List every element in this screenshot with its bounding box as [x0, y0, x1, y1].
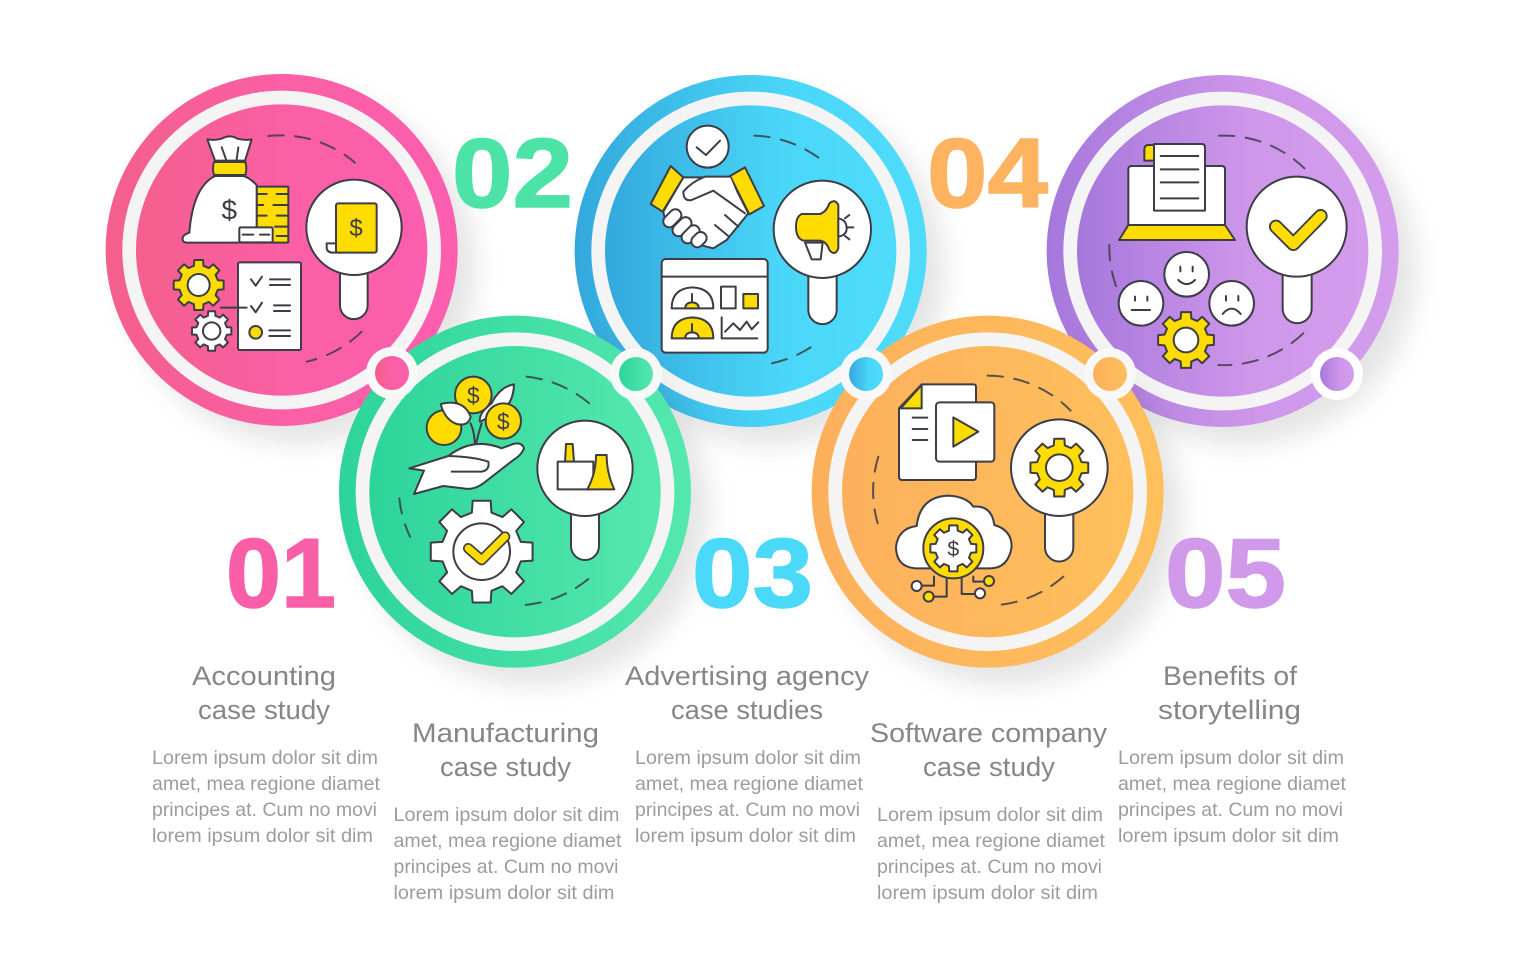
icon: money bag with coins: $	[222, 194, 238, 225]
text block: manufacturing: principes at. Cum no movi	[394, 856, 618, 878]
text block: accounting: amet, mea regione diamet	[152, 773, 381, 795]
panel: software company circle	[812, 316, 1182, 686]
text block: manufacturing: Lorem ipsum dolor sit dim	[394, 804, 620, 826]
icon: money bag with coins	[183, 136, 288, 243]
text block: software company: case study	[923, 752, 1056, 782]
icon: cloud with money gear: $	[947, 537, 959, 561]
icon: cloud with money gear	[896, 496, 1012, 602]
text block: advertising agency: lorem ipsum dolor sit dim	[635, 825, 856, 847]
text block: software company: Software company	[870, 718, 1108, 748]
icon: magnifier with factory	[537, 421, 633, 560]
text block: advertising agency: Advertising agency	[625, 661, 870, 691]
text block: advertising agency: Lorem ipsum dolor sit dim	[635, 747, 861, 769]
text block: advertising agency: case studies	[671, 695, 823, 725]
text block: benefits of storytelling: storytelling	[1158, 695, 1301, 725]
icon: magnifier with invoice: $	[349, 215, 363, 242]
text block: accounting: Accounting	[192, 661, 336, 691]
panel: accounting circle	[106, 74, 476, 444]
icon: feedback faces and gear	[1119, 252, 1254, 368]
text block: accounting: lorem ipsum dolor sit dim	[152, 825, 373, 847]
text block: accounting: principes at. Cum no movi	[152, 799, 377, 821]
icon: magnifier with invoice	[306, 180, 402, 319]
text block: benefits of storytelling	[1118, 661, 1347, 847]
connector dot: purple	[1311, 348, 1363, 400]
text block: benefits of storytelling: Lorem ipsum dolor sit dim	[1118, 747, 1344, 769]
icon: handshake with check badge	[651, 126, 764, 250]
text block: software company: lorem ipsum dolor sit dim	[877, 882, 1098, 904]
connector dot: orange	[1084, 348, 1136, 400]
icon: magnifier with megaphone	[774, 181, 871, 324]
text block: benefits of storytelling: amet, mea regione diamet	[1118, 773, 1347, 795]
connector dot: blue	[840, 348, 892, 400]
text block: manufacturing: Manufacturing	[412, 718, 599, 748]
text block: manufacturing: case study	[440, 752, 571, 782]
connector dot: pink	[366, 347, 418, 399]
text block: advertising agency: amet, mea regione diamet	[635, 773, 864, 795]
text block: benefits of storytelling: lorem ipsum dolor sit dim	[1118, 825, 1339, 847]
text block: advertising agency	[625, 661, 870, 847]
number 04: 04	[927, 118, 1048, 228]
number 03: 03	[692, 518, 813, 628]
icon: hand with money plant: $	[497, 408, 510, 434]
number 02: 02	[452, 118, 573, 228]
icon: document with video	[899, 384, 994, 480]
connector dot: green	[610, 348, 662, 400]
text block: software company: Lorem ipsum dolor sit dim	[877, 804, 1103, 826]
text block: software company: principes at. Cum no movi	[877, 856, 1102, 878]
icon: laptop with document	[1119, 144, 1235, 240]
icon: magnifier with check	[1247, 177, 1347, 323]
icon: magnifier with gear	[1011, 419, 1108, 561]
icon: gear with check	[431, 501, 533, 603]
text block: accounting	[152, 661, 381, 847]
panel: storytelling circle	[1047, 75, 1417, 445]
icon: hand with money plant	[409, 377, 524, 494]
text block: software company	[870, 718, 1108, 904]
text block: accounting: case study	[198, 695, 331, 725]
panel: manufacturing circle	[339, 316, 709, 686]
icon: dashboard window	[662, 259, 768, 353]
text block: software company: amet, mea regione diamet	[877, 830, 1106, 852]
text block: advertising agency: principes at. Cum no movi	[635, 799, 860, 821]
text block: benefits of storytelling: Benefits of	[1163, 661, 1298, 691]
text block: accounting: Lorem ipsum dolor sit dim	[152, 747, 378, 769]
text block: manufacturing: amet, mea regione diamet	[394, 830, 622, 852]
text block: manufacturing	[394, 718, 622, 904]
icon: hand with money plant: $	[467, 382, 480, 408]
panel: advertising agency circle	[575, 75, 945, 445]
number 05: 05	[1165, 518, 1286, 628]
text block: manufacturing: lorem ipsum dolor sit dim	[394, 882, 614, 904]
icon: gears and checklist	[174, 260, 301, 351]
text block: benefits of storytelling: principes at. Cum no movi	[1118, 799, 1343, 821]
number 01: 01	[226, 518, 336, 628]
